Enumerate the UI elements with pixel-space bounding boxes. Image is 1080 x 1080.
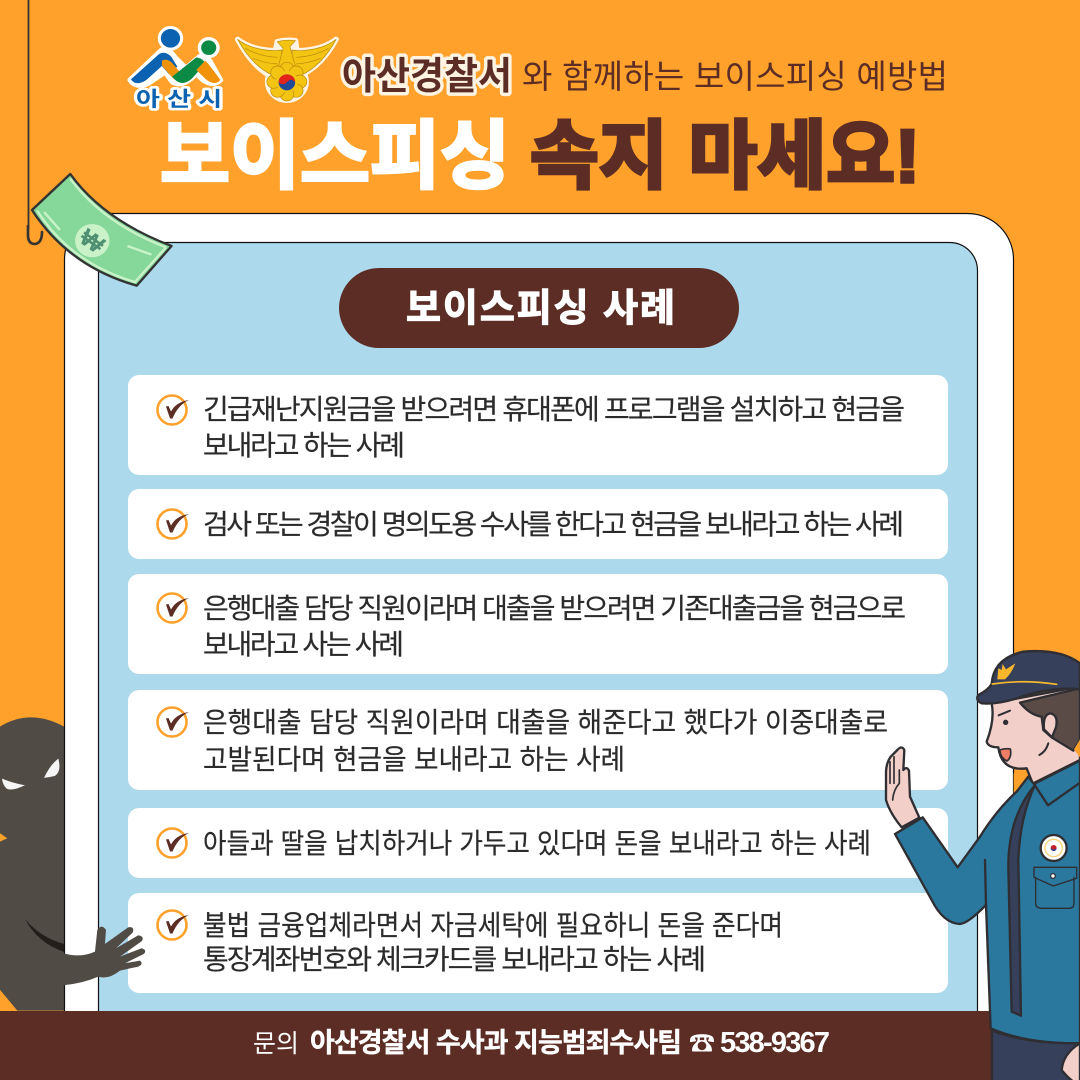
case text [203,910,783,975]
jacket [895,760,1080,1043]
icon: check mark [158,708,189,736]
mouth [1000,749,1011,761]
case text: 통장계좌번호와 체크카드를 보내라고 하는 사례 [203,944,706,975]
case text: 아들과 딸을 납치하거나 가두고 있다며 돈을 보내라고 하는 사례 [203,828,871,859]
eye and eyebrow [999,711,1010,725]
case card 1 [128,375,948,475]
case text [203,707,888,775]
subtitle: with prevention message: 와 함께하는 보이스피싱 예방법 [522,58,948,95]
fishing line and hook [28,0,42,244]
icon: check mark [158,510,189,538]
case text: 은행대출 담당 직원이라며 대출을 받으려면 기존대출금을 현금으로 [203,593,906,624]
collar [1034,761,1080,805]
badge [1041,835,1067,861]
logo mark: figures and mountains [130,26,220,85]
section heading pill [339,268,739,348]
icon: check mark [158,594,189,622]
icon: won banknote on hook [32,174,172,286]
logo: Asan city [130,26,222,111]
footer contact text: 문의 [253,1030,299,1058]
pocket [1034,867,1077,908]
case card 3 [128,574,948,674]
footer contact text: ☎ [689,1030,715,1058]
case card 4 [128,690,948,790]
case text: 은행대출 담당 직원이라며 대출을 해준다고 했다가 이중대출로 [203,707,888,738]
case text: 고발된다며 현금을 보내라고 하는 사례 [203,744,625,775]
jaw crease [1039,743,1048,755]
logo wordmark: 아 산 시 [136,88,222,111]
footer contact text: 538-9367 [720,1027,830,1059]
orange backdrop behind officer [1014,773,1033,797]
icon: check mark [158,910,189,940]
face [987,687,1080,785]
title [160,114,920,198]
case text: 긴급재난지원금을 받으려면 휴대폰에 프로그램을 설치하고 현금을 [203,394,905,425]
case card 2 [128,489,948,559]
case text: 불법 금융업체라면서 자금세탁에 필요하니 돈을 준다며 [203,910,783,941]
icon: check mark [158,828,189,858]
case card 6 [128,893,948,993]
case card 5 [128,808,948,878]
hand [886,747,919,827]
case text: 검사 또는 경찰이 명의도용 수사를 한다고 현금을 보내라고 하는 사례 [203,509,904,540]
section heading pill: 보이스피싱 사례 [406,288,675,330]
orange gap beside neck [1074,739,1080,757]
cap [977,651,1080,704]
title: brown part: 속지 마세요! [530,114,920,198]
footer bar [0,1011,1080,1080]
logo: police eagle emblem [238,39,336,101]
zipper placket [1008,785,1035,1016]
title: white part: 보이스피싱 [160,114,510,198]
trousers [992,1031,1080,1080]
icon: won banknote on hook: ₩ [74,224,110,260]
footer contact text [253,1027,830,1059]
thief silhouette behind the panel [0,717,64,1011]
hair [1020,688,1080,751]
case text [203,593,906,660]
thief arm and hand reaching over panel [63,927,145,985]
panel: light blue screen [98,242,978,1080]
ear [1044,713,1057,737]
case text: 보내라고 하는 사례 [203,430,405,461]
police officer illustration [886,651,1080,1080]
case text [203,394,905,461]
subtitle: police station name: 아산경찰서 [342,56,512,98]
case text: 보내라고 사는 사례 [203,629,404,660]
lower hand [1062,1043,1080,1080]
footer contact text: 아산경찰서 수사과 지능범죄수사팀 [310,1028,682,1058]
panel: white tablet frame [64,214,1014,1080]
icon: check mark [158,396,189,424]
